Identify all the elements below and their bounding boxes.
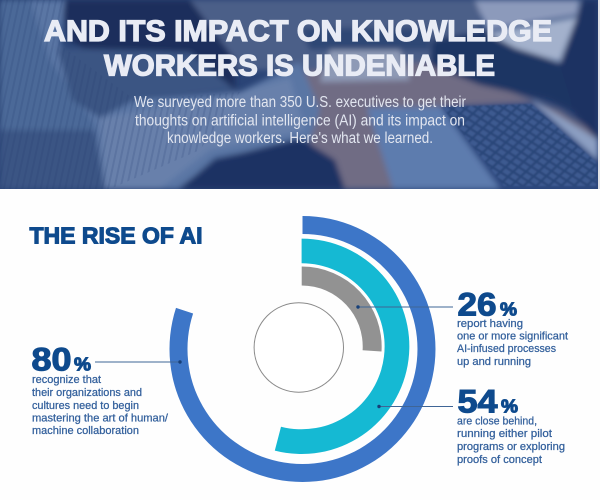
stat 54%: % xyxy=(501,396,518,416)
ring: 26% xyxy=(302,266,382,352)
description 80%: their organizations and xyxy=(32,387,142,399)
photo: dark laptop screen and right corner xyxy=(428,30,574,110)
callout: 54% xyxy=(377,384,565,466)
photo: sweater sleeve xyxy=(0,0,320,189)
intro text xyxy=(134,94,466,147)
intro text: knowledge workers. Here's what we learned. xyxy=(167,130,433,147)
description 26%: report having xyxy=(457,318,523,330)
intro text: thoughts on artificial intelligence (AI) and its impact on xyxy=(135,112,465,130)
title xyxy=(44,15,552,82)
stat 26%: 26 xyxy=(458,286,496,322)
photo: keyboard keys xyxy=(442,104,596,186)
radial chart xyxy=(169,216,435,482)
header photo banner xyxy=(0,0,598,189)
leader line 80% xyxy=(95,360,182,364)
stat 26%: % xyxy=(500,300,517,320)
description 54% xyxy=(457,416,565,466)
description 26% xyxy=(457,318,568,368)
description 26%: AI-infused processes xyxy=(457,343,556,355)
heading: the rise of AI: THE RISE OF AI xyxy=(30,222,202,248)
stat 26% xyxy=(458,286,517,322)
callout: 80% xyxy=(32,342,182,437)
right margin strip xyxy=(598,0,600,189)
description 54%: proofs of concept xyxy=(457,454,542,466)
description 54%: running either pilot xyxy=(457,428,552,440)
stat 54% xyxy=(458,384,518,420)
photo: open laptop xyxy=(367,106,508,189)
description 80%: mastering the art of human/ xyxy=(32,412,169,424)
ring: 80% xyxy=(169,216,435,482)
description 54%: are close behind, xyxy=(457,416,537,428)
description 54%: programs or exploring xyxy=(457,441,565,453)
description 80%: machine collaboration xyxy=(32,425,139,437)
leader line 54% xyxy=(377,405,453,408)
stat 80%: 80 xyxy=(32,342,72,378)
description 80%: recognize that xyxy=(32,374,101,386)
photo: sweater knit xyxy=(30,2,239,188)
stat 80% xyxy=(32,342,91,378)
description 26%: one or more significant xyxy=(457,330,568,342)
ring: 54% xyxy=(275,239,409,454)
title: WORKERS IS UNDENIABLE xyxy=(104,50,495,82)
title: AND ITS IMPACT ON KNOWLEDGE xyxy=(44,15,552,48)
stat 80%: % xyxy=(74,354,91,374)
description 80% xyxy=(32,374,169,437)
photo: desk background xyxy=(180,0,480,70)
description 80%: cultures need to begin xyxy=(32,400,139,412)
description 26%: up and running xyxy=(457,356,531,368)
leader line 26% xyxy=(356,305,453,309)
centre circle xyxy=(254,303,344,392)
callout: 26% xyxy=(356,286,568,368)
photo: table xyxy=(290,62,598,189)
intro text: We surveyed more than 350 U.S. executives to get their xyxy=(134,94,466,111)
photo: dark lower centre xyxy=(178,138,345,189)
stat 54%: 54 xyxy=(458,384,498,420)
